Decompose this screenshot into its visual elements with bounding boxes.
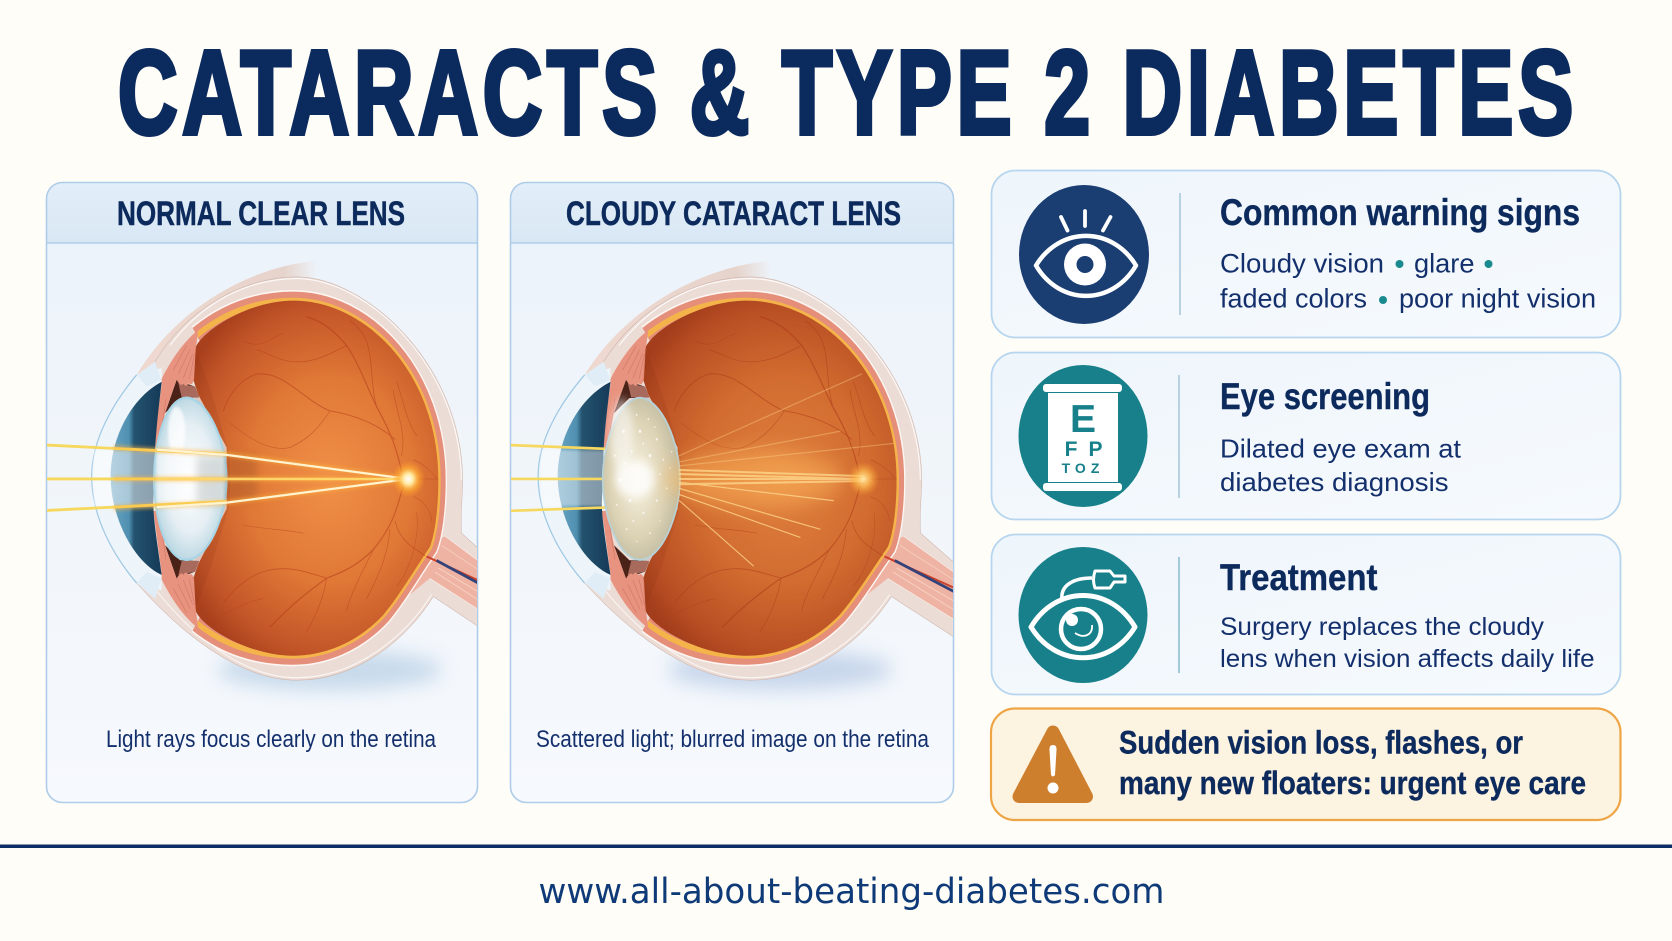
- heading: cloudy cataract lens: CLOUDY CATARACT LENS: [566, 195, 901, 233]
- warning signs list: faded colors: [1220, 284, 1367, 314]
- caption: cloudy: Scattered light; blurred image on the retina: [536, 726, 930, 753]
- footer rule: [0, 844, 1672, 848]
- card: treatment: [992, 534, 1620, 694]
- icon: eye chart: TOZ: [1062, 460, 1104, 476]
- treatment text: [1220, 613, 1594, 673]
- callout: urgent warning: [991, 708, 1620, 820]
- warning signs list: glare: [1414, 248, 1474, 278]
- panel header: normal: [46, 182, 478, 243]
- icon: eye with rays: [1019, 185, 1149, 324]
- eye screening text: Dilated eye exam at: [1220, 434, 1462, 464]
- icon: eye chart: F: [1065, 438, 1078, 461]
- eye screening text: diabetes diagnosis: [1220, 467, 1448, 497]
- urgent warning text: [1119, 724, 1586, 801]
- panel header: cloudy: [510, 182, 954, 243]
- heading: normal clear lens: NORMAL CLEAR LENS: [117, 195, 405, 233]
- treatment text: lens when vision affects daily life: [1220, 645, 1594, 673]
- treatment text: Surgery replaces the cloudy: [1220, 613, 1545, 641]
- icon: eye chart: [1018, 365, 1148, 507]
- illustration: eye with cloudy lens: [510, 261, 967, 690]
- heading: common warning signs: Common warning signs: [1220, 192, 1580, 233]
- footer website: www.all-about-beating-diabetes.com: [538, 872, 1164, 912]
- caption: normal: Light rays focus clearly on the retina: [106, 726, 437, 753]
- icon: eye chart: P: [1088, 438, 1103, 461]
- illustration: eye with clear lens: [40, 261, 507, 690]
- icon: warning triangle: [1019, 732, 1086, 796]
- heading: eye screening: Eye screening: [1220, 376, 1430, 417]
- urgent warning text: many new floaters: urgent eye care: [1119, 765, 1586, 801]
- icon: eye chart: E: [1070, 398, 1096, 441]
- heading: treatment: Treatment: [1220, 557, 1378, 598]
- panel: cloudy cataract lens: [510, 182, 967, 802]
- card: common warning signs: [992, 170, 1620, 338]
- eye screening text: [1220, 434, 1462, 497]
- urgent warning text: Sudden vision loss, flashes, or: [1119, 724, 1523, 760]
- card: eye screening: [992, 352, 1620, 520]
- icon: eye surgery: [1018, 547, 1148, 683]
- warning signs list: Cloudy vision: [1220, 248, 1384, 278]
- warning signs list: [1220, 248, 1596, 314]
- warning signs list: poor night vision: [1399, 284, 1596, 314]
- panel: normal clear lens: [40, 182, 507, 802]
